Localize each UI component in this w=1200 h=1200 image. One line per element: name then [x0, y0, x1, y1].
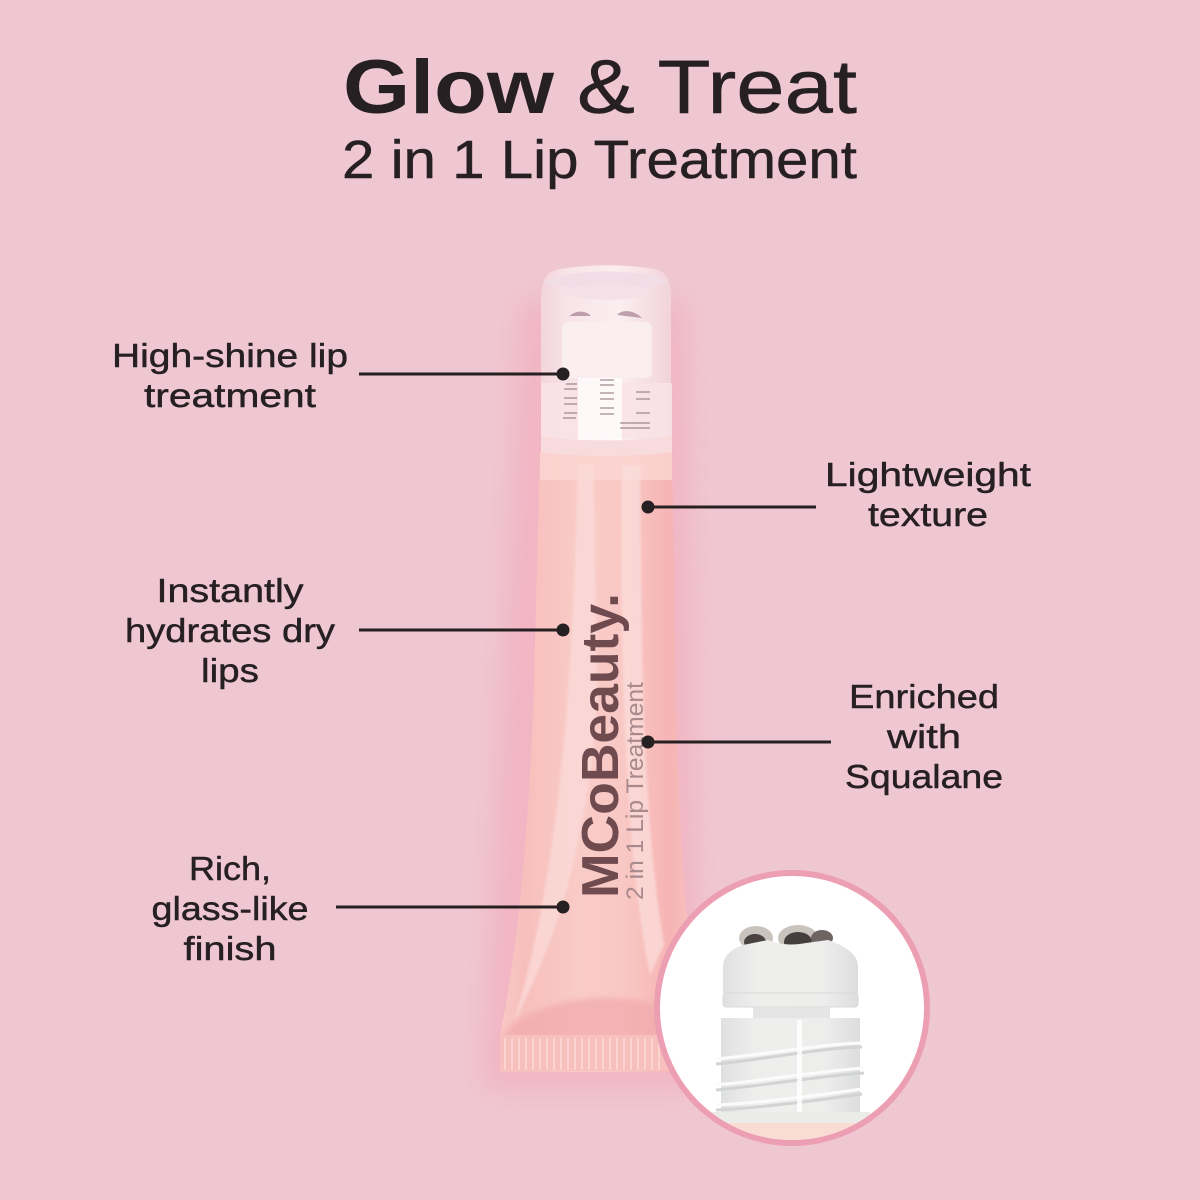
roller head [723, 940, 858, 993]
callout: high-shine: treatment [144, 377, 316, 414]
tube body [500, 452, 700, 1072]
callout: squalane [642, 678, 1003, 795]
callout: squalane: Enriched [849, 678, 999, 715]
title: Glow [343, 45, 555, 130]
callout: lightweight: texture [868, 496, 988, 533]
crimped end [500, 1035, 690, 1071]
callout: finish: Rich, [189, 850, 271, 887]
tube glow [482, 300, 700, 1090]
product name on tube: 2 in 1 Lip Treatment [622, 682, 649, 900]
callout: finish: glass-like [152, 890, 308, 927]
callout: hydrates: hydrates dry [125, 612, 336, 649]
callout: lightweight: Lightweight [825, 456, 1031, 493]
inset: roller tip close-up [654, 870, 930, 1153]
logo text on tube: MCoBeauty. [572, 593, 630, 898]
callout: squalane: Squalane [845, 758, 1003, 795]
rollers [739, 925, 833, 946]
title: & Treat [577, 45, 857, 130]
callout: finish [152, 850, 570, 967]
title [343, 45, 857, 130]
subtitle: 2 in 1 Lip Treatment [342, 130, 857, 190]
pink tube shoulder [728, 1123, 856, 1140]
callout: squalane: with [886, 718, 961, 755]
callout: hydrates: lips [201, 652, 259, 689]
callout: finish: finish [184, 930, 276, 967]
callout: hydrates [125, 572, 570, 689]
callout: high-shine [112, 337, 570, 414]
callout: hydrates: Instantly [156, 572, 304, 609]
clear cap [541, 265, 672, 456]
callout: high-shine: High-shine lip [112, 337, 348, 374]
callout: lightweight [642, 456, 1031, 533]
threaded neck [710, 1018, 870, 1124]
product: lip treatment tube [482, 265, 700, 1090]
